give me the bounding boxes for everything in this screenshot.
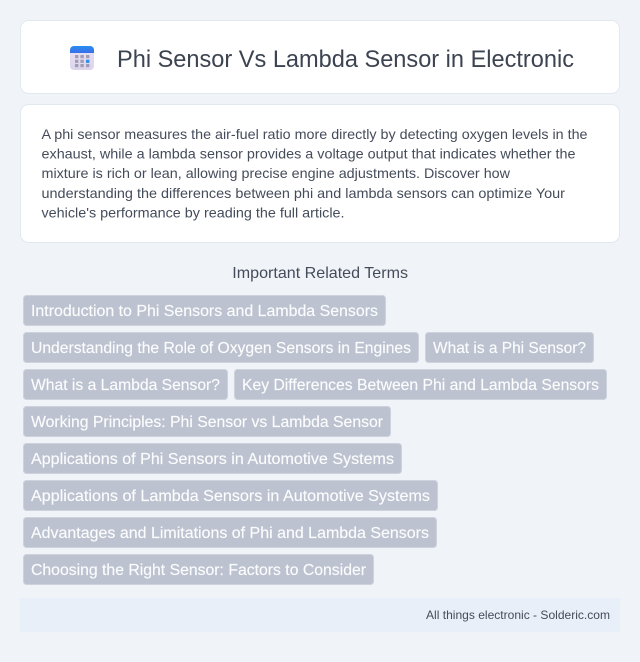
chip: working principles — [24, 406, 390, 436]
chip: what is a phi sensor — [426, 332, 594, 362]
text block: description paragraph: mixture is rich or lean, allowing precise engine adjustments. Discover how — [42, 165, 511, 181]
chip: choosing the right sensor: Choosing the Right Sensor: Factors to Consider — [31, 562, 367, 579]
panel: title header — [20, 20, 620, 94]
chip: applications of lambda sensors — [24, 480, 438, 510]
chip: applications of phi sensors — [24, 444, 402, 474]
text block: description paragraph: A phi sensor measures the air-fuel ratio more directly by detecting oxygen levels in the — [42, 126, 588, 142]
footer credit: All things electronic - Solderic.com — [426, 608, 610, 622]
chip: what is a lambda sensor: What is a Lambda Sensor? — [31, 377, 220, 394]
panel: description — [20, 104, 620, 242]
list of related term chips — [24, 296, 606, 584]
chip: what is a phi sensor: What is a Phi Sensor? — [433, 340, 586, 357]
footer — [20, 598, 620, 632]
chip: introduction — [24, 296, 386, 326]
text block: description paragraph: vehicle's performance by reading the full article. — [42, 204, 345, 220]
chip: advantages and limitations — [24, 518, 436, 548]
heading: important related terms: Important Related Terms — [232, 265, 408, 282]
chip: applications of phi sensors: Applications of Phi Sensors in Automotive Systems — [31, 451, 394, 468]
chip: key differences: Key Differences Between Phi and Lambda Sensors — [242, 377, 599, 394]
chip: key differences — [234, 370, 606, 400]
text block: description paragraph — [42, 126, 588, 220]
chip: choosing the right sensor — [24, 554, 374, 584]
chip: introduction: Introduction to Phi Sensors and Lambda Sensors — [31, 303, 378, 320]
chip: oxygen sensors role — [24, 332, 418, 362]
chip: what is a lambda sensor — [24, 370, 228, 400]
icon: calendar — [70, 46, 94, 70]
text block: description paragraph: understanding the differences between phi and lambda sensors can optimize Your — [42, 185, 565, 201]
title: Phi Sensor Vs Lambda Sensor in Electronic — [117, 46, 574, 73]
chip: oxygen sensors role: Understanding the Role of Oxygen Sensors in Engines — [31, 340, 411, 357]
chip: advantages and limitations: Advantages and Limitations of Phi and Lambda Sensors — [31, 525, 429, 542]
chip: working principles: Working Principles: Phi Sensor vs Lambda Sensor — [31, 414, 384, 431]
chip: applications of lambda sensors: Applications of Lambda Sensors in Automotive Systems — [31, 488, 430, 505]
text block: description paragraph: exhaust, while a lambda sensor provides a voltage output that indicates whether the — [42, 146, 576, 162]
